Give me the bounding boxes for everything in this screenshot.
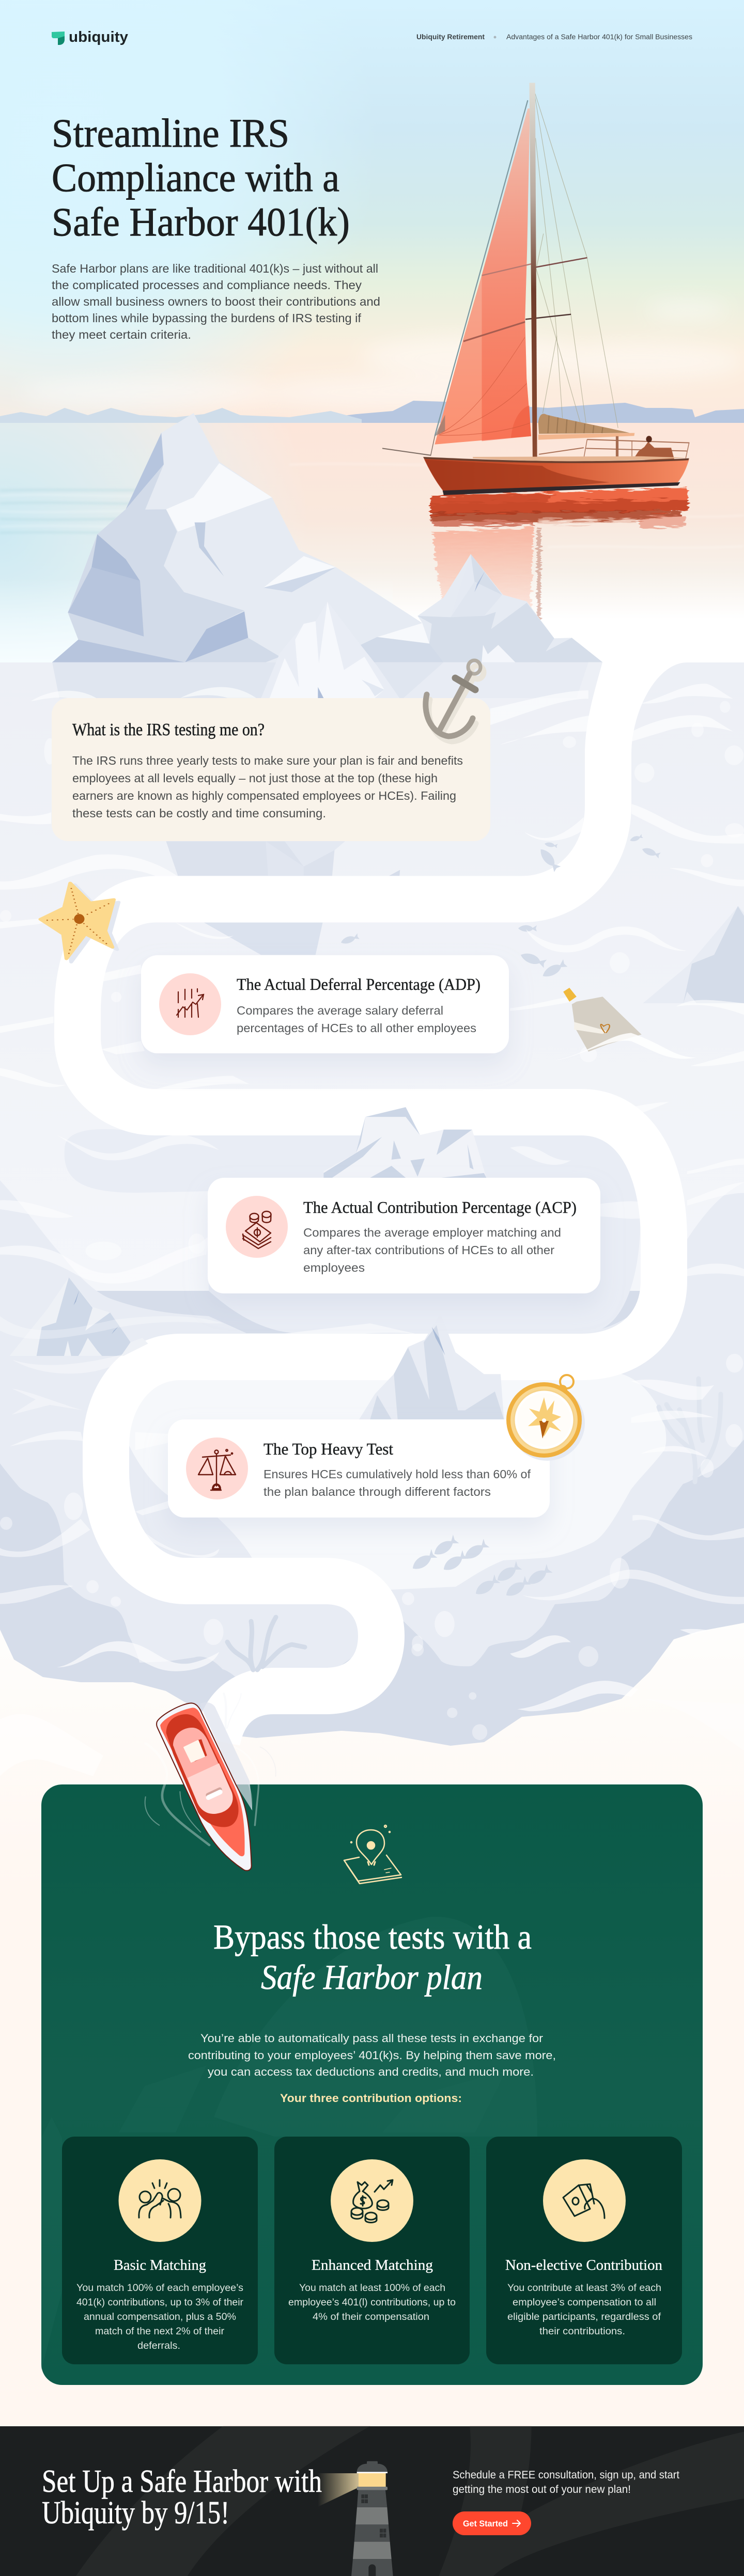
card text: the plan balance through different factors: [264, 1485, 491, 1498]
intro card: what is the IRS testing me on: [52, 698, 490, 841]
card: top heavy test: [168, 1419, 550, 1518]
button: get started: Get Started: [463, 2519, 508, 2528]
option title: Basic Matching: [114, 2257, 206, 2273]
right peak: [417, 554, 602, 662]
hero description: the complicated processes and compliance needs. They: [52, 278, 362, 292]
footer title: Ubiquity by 9/15!: [42, 2495, 229, 2531]
contribution card iceberg: [323, 1107, 486, 1178]
contribution options label: Your three contribution options:: [280, 2092, 462, 2105]
card text: [237, 1004, 476, 1035]
card: actual contribution percentage: [208, 1178, 600, 1293]
intro body text: The IRS runs three yearly tests to make sure your plan is fair and benefits: [72, 754, 463, 767]
card text: Ensures HCEs cumulatively hold less than 60% of: [264, 1467, 531, 1481]
panel intro text: you can access tax deductions and credits, and much more.: [208, 2065, 534, 2078]
underwater iceberg: [52, 662, 588, 698]
hero header and copy: [52, 29, 692, 341]
lower tail of the main iceberg below the intro card: [166, 841, 400, 955]
light beam: [318, 2473, 359, 2507]
icon: cash and coins: [226, 1196, 288, 1258]
option text: You contribute at least 3% of each: [507, 2282, 661, 2294]
top-heavy iceberg: [359, 1313, 504, 1419]
panel heading: Bypass those tests with a: [213, 1917, 532, 1956]
option text: [76, 2282, 244, 2351]
left small iceberg: [9, 1277, 148, 1356]
option title: Non-elective Contribution: [505, 2257, 662, 2273]
main title: Compliance with a: [52, 155, 339, 200]
option text: match of the next 2% of their: [95, 2326, 225, 2337]
rolled sail and boom: [538, 414, 630, 434]
option text: eligible participants, regardless of: [507, 2311, 661, 2322]
hero scene: sky, water, sailboat: [0, 0, 744, 685]
small fish schools: [340, 834, 661, 1600]
option text: their contributions.: [539, 2326, 625, 2337]
footer text: Schedule a FREE consultation, sign up, and start: [453, 2469, 679, 2481]
option text: [507, 2282, 661, 2337]
card text: employees: [303, 1261, 365, 1274]
card text: Compares the average salary deferral: [237, 1004, 443, 1017]
button: get started: [453, 2511, 531, 2535]
main iceberg above and below water: [52, 413, 602, 698]
breadcrumb navigation: Advantages of a Safe Harbor 401(k) for Small Businesses: [506, 33, 692, 41]
card heading: The Actual Contribution Percentage (ACP): [303, 1198, 577, 1216]
rigging: [534, 93, 618, 431]
hero description: they meet certain criteria.: [52, 328, 191, 341]
calm water: [0, 423, 744, 662]
mountains on the horizon: [331, 401, 744, 423]
option text: You match at least 100% of each: [299, 2282, 445, 2294]
option title: Enhanced Matching: [312, 2257, 433, 2273]
option text: [288, 2282, 456, 2322]
intro body text: employees at all levels equally – not just those at the top (these high: [72, 771, 438, 785]
option text: 4% of their compensation: [313, 2311, 429, 2322]
wave ribbons and bubbles in upper sea: [0, 684, 744, 1114]
panel intro text: contributing to your employees’ 401(k)s. By helping them save more,: [188, 2049, 556, 2062]
footer text: getting the most out of your new plan!: [453, 2484, 631, 2495]
intro body text: these tests can be costly and time consuming.: [72, 807, 326, 820]
intro body text: [72, 754, 463, 820]
breadcrumb navigation: [416, 33, 692, 41]
hero description: allow small business owners to boost their contributions and: [52, 295, 380, 308]
card text: Compares the average employer matching and: [303, 1226, 561, 1239]
coral: [659, 1379, 721, 1482]
rail and cockpit: [539, 439, 689, 459]
starfish: [40, 883, 119, 962]
cream fade below the sea with faint waves: [0, 1699, 744, 1776]
option card: basic matching: [62, 2137, 258, 2364]
hull: [424, 457, 689, 492]
iceberg silhouette: [52, 413, 602, 662]
message in a bottle: [553, 988, 696, 1061]
hero description: bottom lines while bypassing the burdens of IRS testing if: [52, 311, 362, 325]
sailboat reflection: [430, 488, 688, 685]
card heading: The Actual Deferral Percentage (ADP): [237, 975, 481, 993]
lighthouse illustration: [318, 2461, 393, 2576]
hero description: Safe Harbor plans are like traditional 401(k)s – just without all: [52, 262, 378, 275]
hero description: [52, 262, 380, 341]
wave ribbons and bubbles in deep sea: [57, 1629, 709, 1740]
panel intro text: You’re able to automatically pass all these tests in exchange for: [200, 2032, 543, 2045]
option text: 401(k) contributions, up to 3% of their: [76, 2297, 244, 2308]
card text: [264, 1467, 531, 1498]
icon: map pin: [344, 1825, 401, 1884]
wave ribbons and bubbles in mid sea: [0, 1135, 744, 1652]
icon: money bag and coins: [331, 2159, 413, 2242]
main title: Streamline IRS: [52, 110, 289, 155]
icon: compass: [506, 1375, 585, 1461]
panel: bypass tests with a safe harbor plan: [41, 1784, 703, 2385]
boat shadow: [200, 1702, 252, 1811]
upper blob behind contribution card: [65, 1129, 641, 1333]
option text: annual compensation, plus a 50%: [84, 2311, 236, 2322]
option text: You match 100% of each employee’s: [76, 2282, 243, 2294]
card text: any after-tax contributions of HCEs to all other: [303, 1243, 554, 1257]
main title: Safe Harbor 401(k): [52, 199, 350, 244]
icon: balance scale: [186, 1437, 248, 1499]
seaweed: [227, 1617, 305, 1670]
card: actual deferral percentage: [141, 955, 509, 1053]
icon: rising chart: [159, 973, 221, 1035]
option card: non-elective contribution: [486, 2137, 682, 2364]
hull: [157, 1703, 252, 1871]
sailboat: [382, 83, 689, 495]
option text: deferrals.: [137, 2340, 180, 2351]
card heading: The Top Heavy Test: [264, 1440, 393, 1458]
sea depth layers: [0, 1291, 744, 1746]
footer title: Set Up a Safe Harbor with: [42, 2464, 322, 2499]
intro body text: earners are known as highly compensated employees or HCEs). Failing: [72, 789, 456, 802]
pale fade under the sea: [0, 1601, 744, 1890]
speedboat illustration: [145, 1694, 276, 1871]
icon: anchor: [426, 660, 484, 741]
panel heading: Safe Harbor plan: [261, 1957, 483, 1997]
footer banner: set up a safe harbor: [0, 2426, 744, 2576]
center spire: [261, 602, 399, 698]
option card: enhanced matching: [274, 2137, 470, 2364]
right iceberg: [643, 906, 744, 1003]
option text: employee’s compensation to all: [513, 2297, 656, 2308]
icon: hand with cash: [543, 2159, 626, 2242]
card text: [303, 1226, 561, 1274]
panel heading: [213, 1917, 532, 1997]
icon: high five: [119, 2159, 202, 2242]
footer title: [42, 2464, 322, 2531]
card text: percentages of HCEs to all other employees: [237, 1021, 476, 1035]
intro heading: What is the IRS testing me on?: [72, 720, 265, 739]
logo: ubiquity: [69, 29, 128, 45]
underwater sea background: [0, 662, 744, 1746]
bowsprit: [382, 436, 435, 455]
white winding path: [78, 662, 687, 1741]
main title: [52, 110, 350, 244]
option text: employee’s 401(l) contributions, up to: [288, 2297, 456, 2308]
panel intro text: [188, 2032, 556, 2078]
footer text: [453, 2469, 679, 2495]
breadcrumb navigation: Ubiquity Retirement: [416, 33, 485, 41]
